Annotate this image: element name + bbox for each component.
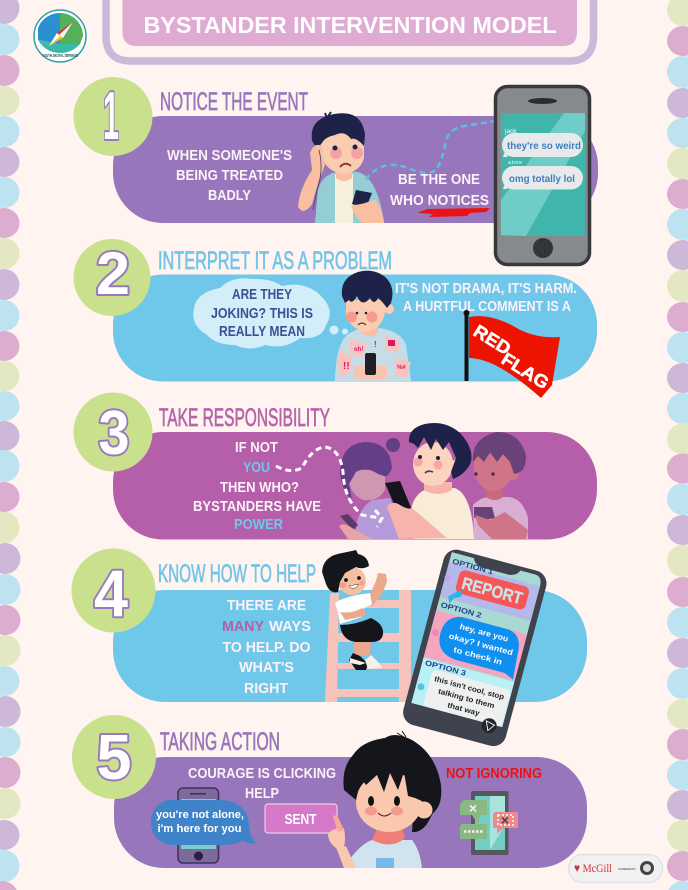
illustration: phone with chat: anne (508, 160, 522, 166)
text: courage is clicking help: COURAGE IS CLICKING (188, 766, 336, 782)
illustration: phone with blocked messages (460, 791, 518, 855)
text: be the one who notices: BE THE ONE (398, 172, 480, 188)
option 3: speak up box: talking to them (437, 687, 496, 710)
text: courage is clicking help: HELP (245, 786, 279, 802)
thought cloud: are they joking (193, 278, 348, 348)
right scalloped border (667, 0, 688, 890)
text: it's not drama, it's harm: IT'S NOT DRAMA, IT'S HARM. (395, 281, 577, 297)
text: if not you then who: BYSTANDERS HAVE (193, 499, 321, 515)
illustration: worried boy with phone: ! (374, 340, 377, 349)
illustration: boy touching ear holding phone (298, 112, 384, 223)
title banner (106, 0, 594, 61)
thought cloud: are they joking: JOKING? THIS IS (211, 306, 313, 322)
badge: McGill: POWERED BY (618, 867, 636, 871)
text: if not you then who (193, 440, 321, 533)
heading: taking action: TAKING ACTION (160, 728, 280, 756)
illustration: middle boy with phone (385, 423, 474, 539)
option 2: check in bubble: okay? I wanted (448, 631, 514, 657)
text: there are many ways to help: THERE ARE (227, 598, 306, 614)
option 2: check in bubble (427, 600, 528, 679)
panel: step 3 take responsibility (74, 392, 597, 540)
heading: interpret it as a problem: INTERPRET IT AS A PROBLEM (158, 247, 392, 275)
chat bubble: they're so weird (502, 133, 583, 157)
heading: notice the event: NOTICE THE EVENT (160, 88, 308, 116)
panel: step 1 notice the event (74, 77, 598, 264)
speech bubble: you're not alone (151, 800, 257, 845)
illustration: phone with supportive message (151, 788, 257, 863)
text: if not you then who: YOU (243, 460, 270, 476)
illustration: boy pressing button (328, 731, 441, 868)
heading: take responsibility: TAKE RESPONSIBILITY (159, 404, 330, 432)
text: when someone's being treated badly (167, 148, 292, 204)
text: when someone's being treated badly: BADLY (208, 188, 251, 204)
text: there are many ways to help: TO HELP. DO (222, 640, 310, 656)
panel: step 4 know how to help (72, 547, 587, 749)
number 5: 5 (96, 721, 132, 793)
badge: McGill (568, 854, 662, 882)
red scribble underline (419, 208, 490, 217)
illustration: worried boy with phone: !! (343, 361, 350, 372)
icon: compass logo: YOUTH DIGITAL DEFENSE (42, 53, 78, 58)
speech bubble: you're not alone: you're not alone, (156, 809, 244, 821)
thought cloud: are they joking: REALLY MEAN (219, 324, 305, 340)
number 3: 3 (98, 399, 130, 468)
text: it's not drama, it's harm (395, 281, 577, 315)
title: BYSTANDER INTERVENTION MODEL (144, 12, 556, 38)
option 3: speak up box: OPTION 3 (424, 658, 467, 678)
illustration: right boy in shadow (473, 432, 528, 539)
chat bubble: omg totally lol (502, 166, 583, 190)
icon: compass logo (34, 10, 86, 62)
option 3: speak up box (414, 658, 513, 727)
icon: red flag: FLAG (498, 349, 553, 393)
thought cloud: are they joking: ARE THEY (232, 287, 292, 303)
text: be the one who notices: WHO NOTICES (390, 193, 489, 209)
panel: step 2 interpret it as a problem (74, 239, 597, 398)
badge: McGill: ♥ McGill (574, 861, 613, 875)
text: when someone's being treated badly: BEING TREATED (176, 168, 283, 184)
illustration: worried boy with phone: oh! (354, 347, 363, 353)
dashed arrow from you to girl (276, 447, 382, 527)
text: there are many ways to help: RIGHT (244, 681, 288, 697)
text: there are many ways to help: WHAT'S (239, 660, 294, 676)
number 4: 4 (94, 556, 128, 630)
number 2: 2 (96, 240, 130, 307)
dashed line from boy to phone (366, 121, 495, 180)
option 2: check in bubble: hey, are you (459, 622, 509, 644)
text: not ignoring: NOT IGNORING (446, 766, 542, 782)
option 2: check in bubble: to check in (453, 645, 503, 667)
text: it's not drama, it's harm: A HURTFUL COMMENT IS A (403, 299, 571, 315)
illustration: child on ladder (322, 550, 387, 670)
chat bubble: omg totally lol: omg totally lol (509, 173, 575, 185)
text: courage is clicking help (188, 766, 336, 802)
text: there are many ways to help: WAYS (269, 619, 311, 635)
option 1: report: REPORT (460, 574, 525, 608)
illustration: worried boy with phone: %# (397, 365, 406, 371)
option 2: check in bubble: OPTION 2 (440, 600, 483, 620)
text: if not you then who: THEN WHO? (220, 480, 299, 496)
icon: red flag: RED (470, 321, 514, 359)
illustration: girl with phone (339, 438, 402, 539)
text: when someone's being treated badly: WHEN SOMEONE'S (167, 148, 292, 164)
panel: step 5 taking action (72, 715, 587, 868)
illustration: phone with three options (400, 547, 549, 749)
sent button (265, 804, 337, 833)
illustration: worried boy with phone (335, 271, 411, 381)
icon: red flag (464, 310, 560, 398)
text: be the one who notices (390, 172, 489, 209)
option 3: speak up box: that way (446, 700, 482, 718)
left scalloped border (0, 0, 20, 890)
illustration: phone with chat (496, 86, 590, 264)
panel: step 1 notice the event: 1 (103, 78, 119, 154)
bubble: x: × (469, 800, 477, 816)
option 1: report: OPTION 1 (451, 557, 494, 576)
option 3: speak up box: this isn't cool, stop (433, 674, 506, 702)
text: if not you then who: IF NOT (235, 440, 278, 456)
heading: know how to help: KNOW HOW TO HELP (158, 560, 316, 588)
chat bubble: they're so weird: they're so weird (507, 140, 581, 152)
text: if not you then who: POWER (234, 517, 283, 533)
text: there are many ways to help: MANY (222, 619, 264, 635)
option 1: report (442, 557, 533, 622)
text: there are many ways to help (222, 598, 311, 697)
sent button: SENT (284, 811, 316, 828)
illustration: ladder (325, 590, 411, 702)
speech bubble: you're not alone: i'm here for you (158, 823, 242, 835)
bubble: dots (460, 824, 487, 839)
bubble: blocked: × (501, 812, 509, 828)
illustration: phone with chat: jack (504, 128, 517, 135)
